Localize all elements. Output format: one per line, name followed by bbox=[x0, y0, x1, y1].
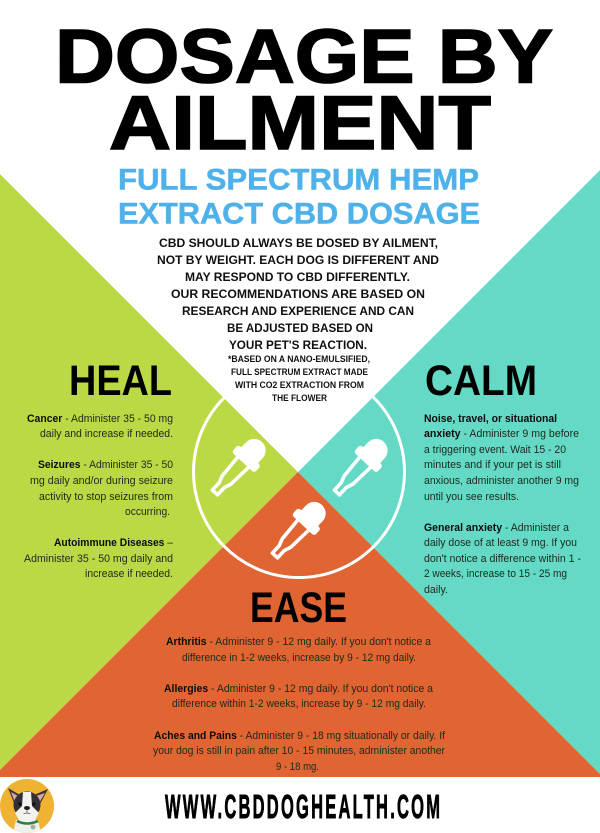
icon: dropper heal bbox=[204, 431, 273, 503]
footnote bbox=[228, 354, 370, 404]
panel: calm teal triangle bbox=[298, 170, 600, 774]
intro text: BE ADJUSTED BASED ON bbox=[227, 321, 373, 335]
intro text: OUR RECOMMENDATIONS ARE BASED ON bbox=[171, 287, 425, 301]
text: calm dosages: anxious, administer another 9 mg bbox=[424, 475, 579, 487]
intro text: MAY RESPOND TO CBD DIFFERENTLY. bbox=[185, 270, 410, 284]
intro text: RESEARCH AND EXPERIENCE AND CAN bbox=[182, 304, 414, 318]
text: calm dosages: Noise, travel, or situational bbox=[424, 413, 557, 425]
text: ease dosages bbox=[153, 636, 446, 773]
text: calm dosages: anxiety - Administer 9 mg before bbox=[424, 428, 579, 440]
text: calm dosages: a triggering event. Wait 15 - 20 bbox=[424, 444, 566, 456]
text: heal dosages: daily and increase if needed. bbox=[40, 428, 173, 440]
text: ease dosages: 9 - 18 mg. bbox=[276, 761, 319, 773]
heading: calm: CALM bbox=[425, 357, 537, 405]
text: heal dosages: increase if needed. bbox=[85, 568, 173, 580]
heading: heal: HEAL bbox=[69, 357, 172, 405]
text: heal dosages: Seizures - Administer 35 - 50 bbox=[38, 459, 173, 471]
text: ease dosages: your dog is still in pain after 10 - 15 minutes, administer another bbox=[153, 745, 445, 757]
subtitle: EXTRACT CBD DOSAGE bbox=[118, 198, 480, 231]
title: AILMENT bbox=[109, 81, 491, 166]
footnote: *BASED ON A NANO-EMULSIFIED, bbox=[228, 354, 370, 365]
footnote: FULL SPECTRUM EXTRACT MADE bbox=[231, 367, 369, 378]
text: calm dosages: General anxiety - Administer a bbox=[424, 522, 570, 534]
title: DOSAGE BY bbox=[55, 14, 553, 100]
text: calm dosages: until you see results. bbox=[424, 491, 519, 503]
intro text bbox=[157, 236, 439, 352]
text: ease dosages: Arthritis - Administer 9 - 12 mg daily. If you don't notice a bbox=[166, 636, 432, 648]
white top wedge bbox=[0, 0, 600, 472]
text: heal dosages: occurring. bbox=[125, 506, 170, 518]
text: calm dosages: daily. bbox=[424, 584, 448, 596]
text: heal dosages: Cancer - Administer 35 - 50 mg bbox=[27, 413, 173, 425]
footnote: THE FLOWER bbox=[272, 393, 327, 404]
subtitle: FULL SPECTRUM HEMP bbox=[118, 164, 479, 197]
icon: dropper ease bbox=[264, 494, 333, 566]
intro text: NOT BY WEIGHT. EACH DOG IS DIFFERENT AND bbox=[157, 253, 439, 267]
text: calm dosages: don't notice a difference within 1 - bbox=[424, 553, 581, 565]
text: calm dosages bbox=[424, 413, 581, 596]
panel: heal green triangle bbox=[0, 174, 298, 770]
icon: dropper calm bbox=[326, 431, 395, 503]
text: heal dosages: Autoimmune Diseases – bbox=[54, 537, 174, 549]
text: heal dosages bbox=[24, 413, 174, 580]
text: heal dosages: Administer 35 - 50 mg daily and bbox=[24, 553, 173, 565]
footnote: WITH CO2 EXTRACTION FROM bbox=[235, 380, 364, 391]
text: heal dosages: mg daily and/or during seizure bbox=[30, 475, 173, 487]
text: ease dosages: Aches and Pains - Administer 9 - 18 mg situationally or daily. If bbox=[154, 730, 446, 742]
subtitle bbox=[118, 164, 480, 231]
heading: ease: EASE bbox=[250, 584, 347, 632]
text: calm dosages: daily dose of at least 9 mg. If you bbox=[424, 537, 577, 549]
intro text: YOUR PET'S REACTION. bbox=[229, 338, 367, 352]
text: calm dosages: 2 weeks, increase to 15 - 25 mg bbox=[424, 568, 567, 580]
text: calm dosages: minutes and if your pet is still bbox=[424, 459, 561, 471]
text: heal dosages: activity to stop seizures from bbox=[39, 491, 173, 503]
circle outline bbox=[194, 366, 404, 578]
text: ease dosages: difference in 1-2 weeks, increase by 9 - 12 mg daily. bbox=[182, 652, 416, 664]
text: ease dosages: difference within 1-2 weeks, increase by 9 - 12 mg daily. bbox=[172, 698, 426, 710]
panel: ease orange triangle bbox=[0, 472, 600, 777]
website url: WWW.CBDDOGHEALTH.COM bbox=[165, 788, 440, 826]
logo: dog badge bbox=[0, 779, 54, 833]
title bbox=[55, 14, 553, 166]
intro text: CBD SHOULD ALWAYS BE DOSED BY AILMENT, bbox=[159, 236, 438, 250]
text: ease dosages: Allergies - Administer 9 - 12 mg daily. If you don't notice a bbox=[164, 683, 434, 695]
